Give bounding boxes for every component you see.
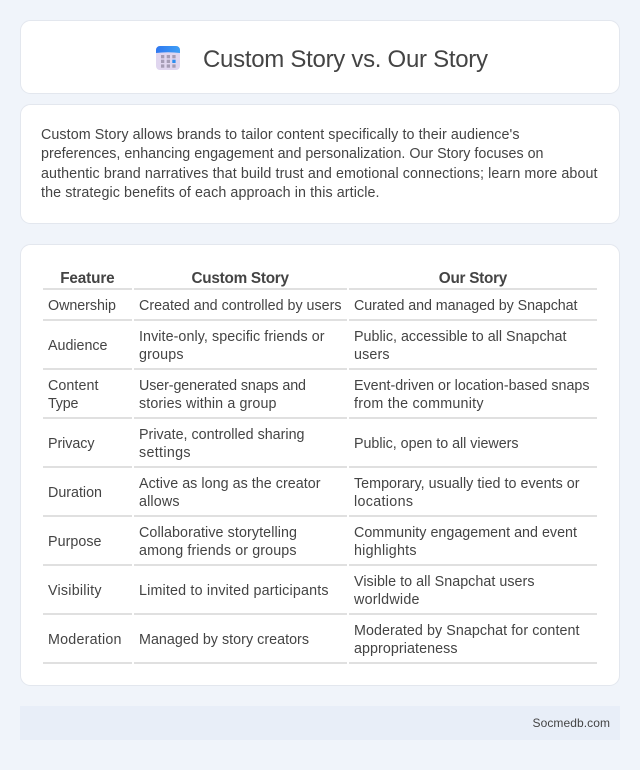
table header row: Custom Story xyxy=(192,270,289,287)
intro text: the strategic benefits of each approach in this article. xyxy=(41,185,380,201)
row: Duration: Duration xyxy=(48,485,102,501)
row: Privacy xyxy=(48,427,518,461)
row: Purpose: among friends or groups xyxy=(139,543,296,559)
row: Duration: Active as long as the creator xyxy=(139,476,321,492)
row: Audience: users xyxy=(354,347,390,363)
row: Content Type: from the community xyxy=(354,396,484,412)
row: Content Type: User-generated snaps and xyxy=(139,378,306,394)
intro text: preferences, enhancing engagement and personalization. Our Story focuses on xyxy=(41,146,544,162)
row: Privacy: Public, open to all viewers xyxy=(354,436,518,452)
row: Content Type: Event-driven or location-based snaps xyxy=(354,378,590,394)
row: Purpose xyxy=(48,525,577,559)
row: Content Type xyxy=(48,378,590,412)
row: Ownership xyxy=(48,298,578,314)
row: Moderation: Moderated by Snapchat for content xyxy=(354,623,580,639)
row: Audience: groups xyxy=(139,347,184,363)
row: Visibility: Limited to invited participants xyxy=(139,583,328,599)
title: Custom Story vs. Our Story xyxy=(203,46,488,73)
row: Audience: Audience xyxy=(48,338,108,354)
panel: comparison table card xyxy=(20,244,620,686)
row: Privacy: settings xyxy=(139,445,190,461)
row: Purpose: Collaborative storytelling xyxy=(139,525,297,541)
row: Purpose: Community engagement and event xyxy=(354,525,577,541)
row: Visibility: Visible to all Snapchat users xyxy=(354,574,534,590)
row: Purpose: Purpose xyxy=(48,534,102,550)
table header row: Our Story xyxy=(439,270,508,287)
row: Moderation xyxy=(48,623,580,657)
row: Visibility: Visibility xyxy=(48,583,102,599)
row: Audience: Invite-only, specific friends or xyxy=(139,329,325,345)
row: Moderation: Moderation xyxy=(48,632,122,648)
row: Audience xyxy=(48,329,567,363)
intro text: authentic brand narratives that build trust and emotional connections; learn more about xyxy=(41,166,598,182)
panel: intro card xyxy=(20,104,620,224)
row: Moderation: appropriateness xyxy=(354,641,458,657)
row: Ownership: Curated and managed by Snapchat xyxy=(354,298,578,314)
row: Duration xyxy=(48,476,580,510)
row: Moderation: Managed by story creators xyxy=(139,632,309,648)
panel: title card xyxy=(20,20,620,94)
row: Ownership: Created and controlled by users xyxy=(139,298,342,314)
intro text xyxy=(41,127,598,201)
row: Duration: locations xyxy=(354,494,413,510)
row: Visibility: worldwide xyxy=(353,592,420,608)
row: Audience: Public, accessible to all Snapchat xyxy=(354,329,567,345)
table header row: Feature xyxy=(60,270,115,287)
row: Privacy: Privacy xyxy=(48,436,95,452)
row: Privacy: Private, controlled sharing xyxy=(139,427,305,443)
row: Duration: allows xyxy=(139,494,180,510)
row: Visibility xyxy=(48,574,534,608)
row: Content Type: Type xyxy=(48,396,79,412)
footer source text: Socmedb.com xyxy=(532,716,610,730)
row: Ownership: Ownership xyxy=(48,298,116,314)
row: Content Type: stories within a group xyxy=(139,396,277,412)
row: Content Type: Content xyxy=(48,378,99,394)
footer bar xyxy=(20,706,620,740)
icon: calendar xyxy=(156,46,180,70)
row: Duration: Temporary, usually tied to events or xyxy=(354,476,580,492)
intro text: Custom Story allows brands to tailor content specifically to their audience's xyxy=(41,127,520,143)
row: Purpose: highlights xyxy=(354,543,416,559)
table header row xyxy=(60,270,508,287)
